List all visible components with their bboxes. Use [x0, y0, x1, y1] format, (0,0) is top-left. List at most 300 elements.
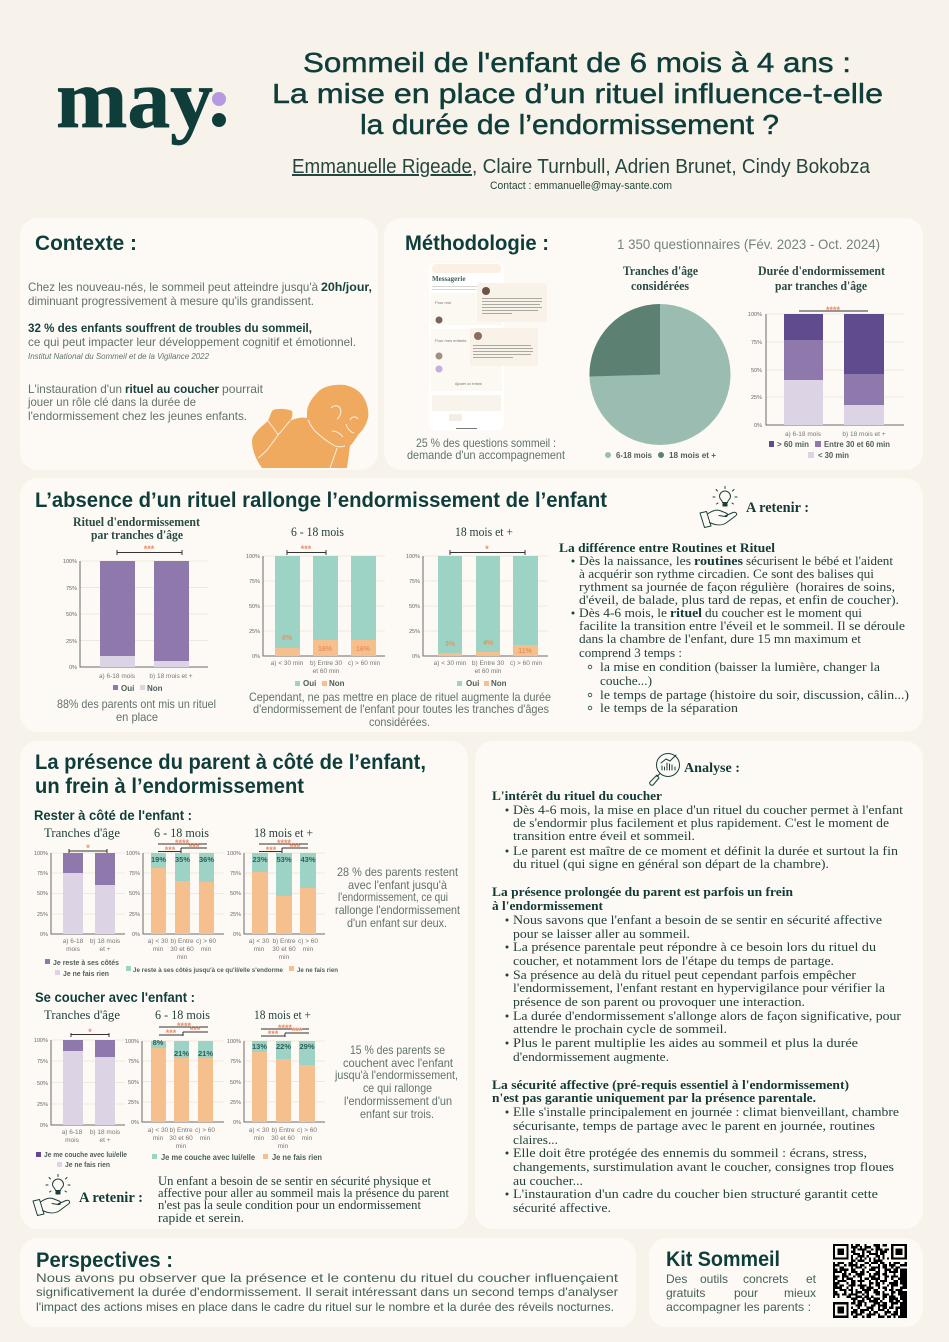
bar chart: ritual 18 mois et +: Non — [491, 679, 507, 688]
bar chart: rester 6-18 mois: **** — [175, 838, 189, 848]
bar chart: ritual 6-18 mois: 25% — [249, 629, 260, 635]
heading: presence: un frein à l’endormissement — [35, 775, 304, 798]
bar chart: rester by age: 25% — [37, 912, 48, 918]
bar chart: ritual 18 mois et +: 100% — [406, 554, 420, 560]
bar chart: rester 6-18 mois: b) Entre — [170, 938, 194, 945]
icon: baby — [252, 385, 368, 468]
bar chart: coucher 18 mois et +: **** — [278, 1023, 292, 1033]
text block: presence prolongee — [492, 884, 902, 1064]
heading: absence: L’absence d’un rituel rallonge l’endormissement de l’enfant — [35, 489, 607, 512]
bar chart: ritual 18 mois et +: a) < 30 min — [434, 660, 467, 667]
text block: kit sommeil: gratuits — [666, 1286, 705, 1300]
text block: contexte: Institut National du Sommeil et de la Vigilance 2022 — [28, 352, 210, 361]
bar chart: rester by age: et + — [99, 946, 111, 953]
title: la durée de l’endormissement ? — [360, 109, 779, 140]
bar chart: coucher 18 mois et +: min — [302, 1135, 313, 1142]
bar chart: rester 6-18 mois: 30 et 60 — [170, 946, 194, 953]
bar chart: ritual 18 mois et +: 0% — [412, 654, 420, 660]
bar chart: coucher by age: 25% — [37, 1102, 48, 1108]
bar chart: coucher 18 mois et +: *** — [292, 1026, 303, 1036]
bar chart: coucher 6-18 mois — [125, 1021, 224, 1150]
text block: routines et rituel — [559, 540, 909, 715]
bar chart: ritual 18 mois et +: 25% — [409, 629, 420, 635]
bar chart: ritual 18 mois et +: b) Entre 30 — [472, 660, 504, 667]
bar chart: rester 18 mois et +: 75% — [230, 871, 241, 877]
heading: presence — [35, 751, 426, 798]
bar chart: ritual by age: 75% — [66, 586, 77, 592]
text block: a retenir: affective pour aller au sommeil mais la présence du parent — [158, 1185, 449, 1200]
icon: magnifier chart — [650, 754, 680, 785]
bar chart: ritual 6-18 mois: 16% — [356, 646, 371, 653]
chart titles: se coucher: Tranches d'âge — [44, 1007, 120, 1022]
bar chart: rester 18 mois et +: 30 et 60 — [272, 946, 296, 953]
bar chart: duration by age: 50% — [751, 368, 762, 374]
bar chart: rester by age: 50% — [37, 891, 48, 897]
title — [272, 47, 883, 140]
text block: contexte: 20h/jour, — [321, 280, 372, 294]
text block: kit sommeil: Des — [666, 1272, 687, 1286]
bar chart: ritual 6-18 mois: 50% — [249, 604, 260, 610]
bar chart: rester 6-18 mois: 25% — [129, 912, 140, 918]
bar chart: coucher 18 mois et +: a) < 30 — [249, 1127, 270, 1134]
caption: accompagnement: 25 % des questions sommeil : — [416, 436, 556, 450]
caption: 15 %: ce qui rallonge — [363, 1081, 432, 1095]
text block: a retenir: Un enfant a besoin de se sentir en sécurité physique et — [158, 1173, 431, 1188]
bar chart: coucher by age: 75% — [37, 1059, 48, 1065]
chart titles: se coucher: 18 mois et + — [254, 1007, 311, 1022]
logo: may: may — [56, 53, 213, 146]
bar chart: rester 6-18 mois: 19% — [151, 855, 166, 864]
chart title: 6-18 mois: 6 - 18 mois — [291, 524, 344, 539]
app screenshot: Ajouter un enfant — [455, 382, 482, 386]
text block: routines et rituel: d'éveil, de balade, plus tard de repas, et enfin de coucher). — [579, 592, 899, 607]
legend: duration: Entre 30 et 60 min — [824, 440, 890, 449]
bar chart: ritual by age: Oui — [121, 684, 134, 693]
bar chart: ritual 6-18 mois: c) > 60 min — [348, 660, 381, 667]
chart titles: rester — [44, 825, 313, 840]
text block: a retenir: n'est pas la seule condition pour un endormissement — [158, 1197, 421, 1212]
caption: 15 %: l'endormissement d'un — [344, 1094, 452, 1108]
bar chart: rester 18 mois et +: min — [254, 946, 265, 953]
text block: interet du rituel: de s'endormir plus facilement et plus rapidement. C'est le moment de — [513, 815, 889, 830]
bar chart: rester 18 mois et +: b) Entre — [272, 938, 296, 945]
bar chart: rester by age: * — [86, 843, 90, 853]
heading: duration chart: par tranches d'âge — [775, 278, 867, 293]
bar chart: rester 6-18 mois: 50% — [129, 891, 140, 897]
panel: methodologie — [384, 218, 923, 470]
bar chart: coucher 6-18 mois: min — [153, 1135, 164, 1142]
bar chart: coucher 18 mois et +: 30 et 60 — [271, 1135, 295, 1142]
bar chart: coucher 18 mois et +: 29% — [299, 1042, 315, 1051]
text block: routines et rituel: dans la chambre de l'enfant, dure 15 mn maximum et — [579, 631, 861, 646]
text block: presence prolongee: présence de son parent ou provoquer une interaction. — [513, 994, 805, 1009]
bar chart: coucher by age — [34, 1027, 125, 1144]
chart titles: rester: 18 mois et + — [254, 825, 313, 840]
icon: hand with light bulb — [33, 1174, 70, 1216]
legend: duration: > 60 min — [777, 440, 809, 449]
bar chart: ritual 18 mois et +: 4% — [483, 640, 494, 647]
text block: kit sommeil — [666, 1272, 817, 1314]
legend: pie — [605, 451, 716, 460]
text block: securite affective: L'instauration d'un cadre du coucher bien structuré garantit cette — [513, 1186, 878, 1201]
bar chart: rester 18 mois et + — [227, 838, 325, 961]
chart title: 18 mois et +: 18 mois et + — [455, 524, 513, 539]
bar chart: ritual 18 mois et + — [406, 544, 548, 688]
text block: routines et rituel: couche...) — [600, 673, 652, 688]
bar chart: coucher 18 mois et +: 75% — [230, 1059, 241, 1065]
text block: securite affective: au coucher... — [513, 1173, 583, 1188]
text block: routines et rituel: la mise en condition (baisser la lumière, changer la — [600, 659, 880, 674]
bar chart: rester 18 mois et +: 53% — [276, 855, 292, 864]
message bubble 1 — [477, 283, 547, 322]
bar chart: coucher 18 mois et +: 13% — [252, 1042, 267, 1051]
bar chart: coucher by age: 0% — [40, 1123, 48, 1129]
caption: accompagnement — [407, 436, 566, 462]
bar chart: coucher 6-18 mois: 75% — [128, 1059, 139, 1065]
bar chart: rester 18 mois et +: c) > 60 — [298, 938, 318, 945]
bar chart: coucher by age: mois — [65, 1137, 80, 1144]
text block: interet du rituel: transition entre éveil et sommeil. — [513, 828, 695, 843]
text block: contexte: Chez les nouveau-nés, le sommeil peut atteindre jusqu'à — [28, 280, 318, 294]
text block: presence prolongee: d'endormissement augmente. — [513, 1049, 669, 1064]
bar chart: ritual 6-18 mois: b) Entre 30 — [310, 660, 342, 667]
bar chart: coucher 6-18 mois: min — [176, 1143, 187, 1150]
text block: presence prolongee: Sa présence au delà du rituel peut cependant parfois empêcher — [513, 967, 857, 982]
bar chart: rester 18 mois et +: min — [303, 946, 314, 953]
heading: ritual chart — [73, 514, 201, 542]
text block: securite affective: sécurité affective. — [513, 1200, 611, 1215]
bar chart: rester 6-18 mois: *** — [189, 842, 200, 852]
caption: accompagnement: demande d'un accompagnement — [407, 448, 566, 462]
text block: presence prolongee: La présence prolongée du parent est parfois un frein — [492, 884, 794, 899]
caption: 28 % — [335, 865, 461, 930]
bar chart: rester 18 mois et +: 43% — [300, 855, 316, 864]
bar chart: rester by age: 0% — [40, 932, 48, 938]
legend: rester: Je ne fais rien — [63, 971, 109, 978]
legend: pie: 18 mois et + — [669, 451, 716, 460]
bar chart: rester 6-18 mois: c) > 60 — [196, 938, 216, 945]
bar chart: ritual by age: 0% — [69, 665, 77, 671]
bar chart: duration by age — [748, 305, 904, 438]
bar chart: coucher 6-18 mois: 21% — [174, 1049, 189, 1058]
bar chart: coucher 18 mois et +: 22% — [276, 1042, 291, 1051]
text block: routines et rituel: facilite la transition entre l'éveil et le sommeil. Il se déroule — [579, 618, 905, 633]
text block: interet du rituel — [492, 788, 903, 871]
bar chart: ritual 6-18 mois: Non — [329, 679, 345, 688]
bar chart: rester by age: a) 6-18 — [63, 938, 84, 945]
app screenshot — [429, 263, 547, 430]
caption: cependant: Cependant, ne pas mettre en place de rituel augmente la durée — [249, 690, 551, 704]
text block: presence prolongee: La durée d'endormissement s'allonge alors de façon significative, pour — [513, 1008, 902, 1023]
text block: routines et rituel: routines — [694, 553, 743, 568]
chart titles: se coucher: 6 - 18 mois — [155, 1007, 210, 1022]
caption: 15 %: enfant sur trois. — [360, 1107, 434, 1121]
text block: securite affective: n'est pas garantie uniquement par la présence parentale. — [492, 1090, 816, 1105]
bar chart: coucher 18 mois et +: min — [254, 1135, 265, 1142]
bar chart: rester 18 mois et +: 23% — [252, 855, 268, 864]
bar chart: rester by age — [34, 843, 125, 953]
text block: routines et rituel: Dès 4-6 mois, le — [579, 605, 667, 620]
chart titles: rester: 6 - 18 mois — [154, 825, 209, 840]
bar chart: duration by age: **** — [826, 305, 840, 315]
text block: interet du rituel: du rituel (qui signe en général son départ de la chambre). — [513, 856, 829, 871]
chart titles: rester: Tranches d'âge — [44, 825, 120, 840]
bar chart: coucher 6-18 mois: a) < 30 — [148, 1127, 169, 1134]
bar chart: ritual 18 mois et +: c) > 60 min — [510, 660, 543, 667]
bar chart: rester 18 mois et +: 0% — [233, 932, 241, 938]
text block: routines et rituel: comprend 3 temps : — [579, 645, 682, 660]
bar chart: ritual 6-18 mois: 0% — [252, 654, 260, 660]
bar chart: coucher 6-18 mois: 8% — [153, 1038, 164, 1047]
bar chart: coucher 6-18 mois: 25% — [128, 1100, 139, 1106]
heading: perspectives: Perspectives : — [36, 1249, 173, 1272]
text block: contexte: L'instauration d'un — [28, 382, 122, 396]
bar chart: rester 18 mois et +: *** — [266, 845, 277, 855]
heading: kit sommeil: Kit Sommeil — [666, 1248, 780, 1271]
caption: 28 %: d'un enfant sur deux. — [347, 916, 447, 930]
authors — [292, 156, 871, 178]
bar chart: coucher 18 mois et +: c) > 60 — [297, 1127, 317, 1134]
bar chart: duration by age: 0% — [754, 423, 762, 429]
bar chart: ritual 6-18 mois: Oui — [303, 679, 316, 688]
text block: interet du rituel: Le parent est maître de ce moment et définit la durée et surtout la fin — [513, 843, 899, 858]
text block: kit sommeil: concrets — [743, 1272, 788, 1286]
bar chart: rester 6-18 mois: min — [201, 946, 212, 953]
legend: pie: 6-18 mois — [616, 451, 653, 460]
text block: contexte: rituel au coucher — [125, 382, 219, 396]
bar chart: ritual 6-18 mois: 75% — [249, 579, 260, 585]
text block: presence prolongee: attendre le prochain cycle de sommeil. — [513, 1021, 727, 1036]
bar chart: coucher by age: 100% — [34, 1038, 48, 1044]
bar chart: rester 18 mois et +: min — [279, 954, 290, 961]
bar chart: coucher 18 mois et +: min — [278, 1143, 289, 1150]
bar chart: coucher 6-18 mois: 21% — [198, 1049, 213, 1058]
text block: routines et rituel: du coucher est le moment qui — [705, 605, 862, 620]
text block: perspectives: l'impact des actions mises en place dans le cadre du rituel sur le nombre et la durée des réveils nocturnes. — [36, 1300, 614, 1314]
bar chart: ritual 6-18 mois: a) < 30 min — [271, 660, 304, 667]
heading: methodologie: Méthodologie : — [405, 232, 549, 255]
bar chart: rester 6-18 mois: 36% — [199, 855, 214, 864]
text block: kit sommeil: pour — [734, 1286, 758, 1300]
legend: se coucher: Je me couche avec lui/elle — [161, 1153, 256, 1162]
text block: perspectives: significativement la durée d'endormissement. Il serait intéressant dans un second temps d'analyser — [36, 1285, 618, 1299]
bar chart: duration by age: 100% — [748, 312, 762, 318]
contact: Contact : emmanuelle@may-sante.com — [490, 180, 672, 192]
bar chart: ritual 6-18 mois: 16% — [318, 646, 333, 653]
text block: kit sommeil: mieux — [784, 1286, 816, 1300]
bar chart: coucher 6-18 mois: *** — [190, 1025, 201, 1035]
legend: rester — [45, 959, 338, 978]
panel: absence de rituel — [20, 478, 923, 732]
bar chart: ritual 18 mois et +: 50% — [409, 604, 420, 610]
caption: 88%: 88% des parents ont mis un rituel — [57, 697, 216, 711]
text block: contexte: l'endormissement chez les jeunes enfants. — [28, 409, 247, 423]
bar chart: rester 6-18 mois: *** — [165, 845, 176, 855]
bar chart: ritual 6-18 mois: 8% — [282, 635, 293, 642]
caption: 15 % — [334, 1043, 458, 1121]
bar chart: rester by age: 100% — [34, 851, 48, 857]
bar chart: rester 18 mois et +: *** — [290, 842, 301, 852]
bar chart: rester 6-18 mois: a) < 30 — [148, 938, 169, 945]
bar chart: rester 6-18 mois: 100% — [126, 851, 140, 857]
text block: securite affective: Elle doit être protégée des ennemis du sommeil : écrans, stress, — [513, 1145, 867, 1160]
subheading: se coucher: Se coucher avec l'enfant : — [35, 990, 195, 1005]
text block: routines et rituel: rythment sa journée de façon régulière (horaires de soins, — [579, 579, 895, 594]
title: Sommeil de l'enfant de 6 mois à 4 ans : — [303, 47, 851, 78]
text block: presence prolongee: à l'endormissement — [492, 898, 604, 913]
bar chart: coucher 18 mois et + — [227, 1023, 325, 1150]
bar chart: rester 18 mois et +: **** — [277, 838, 291, 848]
caption: 28 %: 28 % des parents restent — [337, 865, 459, 879]
heading: pie chart: Tranches d'âge — [623, 263, 698, 278]
text block: routines et rituel: sécurisent le bébé et l'aident — [746, 553, 893, 568]
caption: 15 %: couchent avec l'enfant — [343, 1056, 454, 1070]
bar chart: coucher 6-18 mois: 50% — [128, 1080, 139, 1086]
text block: securite affective: changements, surstimulation avant le coucher, consignes trop floues — [513, 1159, 894, 1174]
text block: perspectives: Nous avons pu observer que la présence et le contenu du rituel du coucher influençaient — [36, 1271, 619, 1285]
caption: cependant: d'endormissement de l'enfant pour toutes les tranches d'âges — [253, 702, 549, 716]
text block: contexte: pourrait — [222, 382, 264, 396]
heading: analyse: Analyse : — [684, 761, 740, 776]
bar chart: coucher 6-18 mois: 30 et 60 — [169, 1135, 193, 1142]
bar chart: ritual by age: 50% — [66, 612, 77, 618]
bar chart: coucher 6-18 mois: 0% — [131, 1120, 139, 1126]
bar chart: duration by age: 25% — [751, 395, 762, 401]
bar chart: rester 18 mois et +: a) < 30 — [249, 938, 270, 945]
bar chart: rester 6-18 mois: 75% — [129, 871, 140, 877]
bar chart: rester by age: mois — [66, 946, 81, 953]
panel: contexte — [20, 218, 378, 470]
authors: Emmanuelle Rigeade — [292, 156, 472, 178]
text block: perspectives — [36, 1271, 619, 1314]
heading: pie chart: considérées — [631, 278, 689, 293]
bar chart: rester 18 mois et +: 100% — [227, 851, 241, 857]
legend: se coucher: Je me couche avec lui/elle — [44, 1152, 127, 1159]
text block: contexte: diminuant progressivement à mesure qu'ils grandissent. — [28, 294, 314, 308]
bar chart: ritual by age: 25% — [66, 639, 77, 645]
bar chart: rester 6-18 mois: 0% — [132, 932, 140, 938]
subheading: rester: Rester à côté de l'enfant : — [34, 808, 192, 823]
bar chart: rester 18 mois et +: 50% — [230, 891, 241, 897]
legend: se coucher — [36, 1152, 322, 1169]
sample size: 1 350 questionnaires (Fév. 2023 - Oct. 2024) — [617, 236, 880, 252]
legend: rester: Je ne fais rien — [297, 967, 338, 974]
bar chart: coucher 6-18 mois: **** — [177, 1021, 191, 1031]
app screenshot: Pour mes enfants — [435, 338, 466, 343]
bar chart: coucher 6-18 mois: 100% — [125, 1039, 139, 1045]
bar chart: ritual by age: 100% — [63, 559, 77, 565]
bar chart: ritual 6-18 mois: et 60 min — [313, 668, 340, 675]
caption: 88%: en place — [116, 710, 158, 724]
text block: kit sommeil: outils — [700, 1272, 728, 1286]
text block: routines et rituel: le temps de la séparation — [600, 700, 739, 715]
caption: cependant — [249, 690, 551, 729]
icon: hand with light bulb — [700, 486, 737, 528]
bar chart: coucher by age: 50% — [37, 1081, 48, 1087]
text block: contexte: ce qui peut impacter leur développement cognitif et émotionnel. — [28, 335, 356, 349]
text block: contexte: 32 % des enfants souffrent de troubles du sommeil, — [28, 321, 312, 335]
chart titles: se coucher — [44, 1007, 311, 1022]
text block: routines et rituel: le temps de partage (histoire du soir, discussion, câlin...) — [600, 687, 909, 702]
heading: a retenir: A retenir : — [746, 500, 809, 516]
app screenshot: Pour moi — [435, 300, 451, 305]
bar chart: rester by age: b) 18 mois — [90, 938, 121, 945]
text block: securite affective: claires... — [513, 1132, 558, 1147]
bar chart: coucher 18 mois et +: 50% — [230, 1080, 241, 1086]
bar chart: coucher by age: a) 6-18 — [62, 1129, 83, 1136]
panel: analyse — [475, 741, 923, 1229]
bar chart: ritual 18 mois et +: 75% — [409, 579, 420, 585]
caption: 15 %: 15 % des parents se — [350, 1043, 445, 1057]
text block: interet du rituel: L'intérêt du rituel du coucher — [492, 788, 662, 803]
text block: presence prolongee: l'endormissement, l'enfant restant en hypervigilance pour vérifier la — [513, 980, 885, 995]
heading: duration chart — [758, 263, 886, 293]
bar chart: ritual 18 mois et +: 11% — [518, 648, 533, 655]
text block: a retenir — [158, 1173, 449, 1225]
text block: kit sommeil: accompagner les parents : — [666, 1300, 811, 1314]
message bubble 2 — [470, 328, 538, 366]
legend: rester: Je reste à ses côtés — [53, 960, 119, 967]
legend: rester: Je reste à ses côtés jusqu'à ce qu'il/elle s'endorme — [133, 967, 283, 974]
bar chart: ritual by age: *** — [144, 544, 155, 554]
app screenshot: Messagerie — [432, 275, 465, 283]
bar chart: coucher 18 mois et +: 0% — [233, 1120, 241, 1126]
legend: se coucher: Je ne fais rien — [272, 1153, 322, 1162]
bar chart: rester 6-18 mois: 35% — [175, 855, 190, 864]
bar chart: ritual 18 mois et +: 3% — [445, 641, 456, 648]
bar chart: ritual 6-18 mois: 100% — [246, 554, 260, 560]
heading: duration chart: Durée d'endormissement — [758, 263, 886, 278]
bar chart: rester 6-18 mois: min — [177, 954, 188, 961]
caption: 28 %: avec l'enfant jusqu'à — [348, 878, 447, 892]
text block: contexte: jouer un rôle clé dans la durée de — [27, 395, 196, 409]
caption: 15 %: jusqu'à l'endormissement, — [334, 1068, 458, 1082]
bar chart: rester 6-18 mois: min — [153, 946, 164, 953]
heading: ritual chart: Rituel d'endormissement — [73, 514, 201, 529]
panel: kit sommeil — [649, 1238, 923, 1327]
text block: a retenir: rapide et serein. — [158, 1210, 244, 1225]
text block: presence prolongee: Nous savons que l'enfant a besoin de se sentir en sécurité affective — [513, 912, 882, 927]
bar chart: coucher by age: * — [88, 1027, 92, 1037]
text block: routines et rituel: La différence entre Routines et Rituel — [559, 540, 775, 555]
text block: interet du rituel: Dès 4-6 mois, la mise en place d'un rituel du coucher permet à l'enfant — [513, 802, 903, 817]
bar chart: ritual 6-18 mois: *** — [301, 544, 312, 554]
bar chart: ritual 6-18 mois — [246, 544, 385, 688]
text block: kit sommeil: et — [806, 1272, 817, 1286]
bar chart: coucher 18 mois et +: 25% — [230, 1100, 241, 1106]
authors: , Claire Turnbull, Adrien Brunet, Cindy Bokobza — [472, 156, 871, 178]
heading: a retenir: A retenir : — [79, 1190, 143, 1206]
bar chart: duration by age: b) 18 mois et + — [842, 431, 886, 438]
pie chart: age ranges — [589, 304, 730, 445]
caption: cependant: considérées. — [369, 715, 430, 729]
bar chart: coucher by age: b) 18 mois — [90, 1129, 121, 1136]
text block: routines et rituel: Dès la naissance, les — [579, 553, 691, 568]
heading: ritual chart: par tranches d'âge — [91, 527, 183, 542]
heading: contexte: Contexte : — [35, 232, 137, 255]
bar chart: ritual by age: a) 6-18 mois — [99, 673, 136, 680]
bar chart: coucher 6-18 mois: b) Entre — [169, 1127, 193, 1134]
bar chart: rester 18 mois et +: 25% — [230, 912, 241, 918]
text block: securite affective — [492, 1077, 899, 1215]
heading: pie chart — [623, 263, 698, 293]
bar chart: ritual 18 mois et +: * — [485, 544, 489, 554]
text block: securite affective: sécurisante, temps de partage avec le parent en journée, routines — [513, 1118, 875, 1133]
bar chart: ritual 18 mois et +: Oui — [466, 679, 479, 688]
bar chart: coucher 6-18 mois: *** — [166, 1028, 177, 1038]
bar chart: coucher 18 mois et +: b) Entre — [271, 1127, 295, 1134]
caption: 88% — [57, 697, 216, 724]
